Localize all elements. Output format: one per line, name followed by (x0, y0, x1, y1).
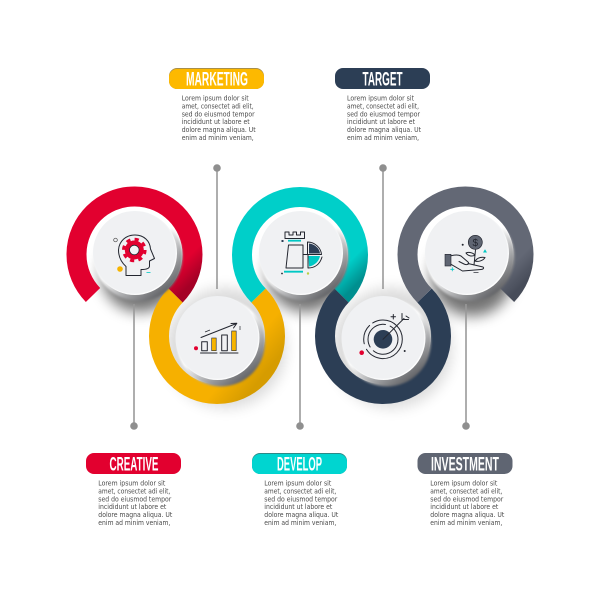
label: investment (418, 453, 512, 476)
disc: marketing (176, 296, 265, 386)
label: develop (252, 453, 347, 476)
text: investment: dolore magna aliqua. Ut (430, 511, 505, 519)
ring: teal (242, 197, 358, 296)
text: investment: Lorem ipsum dolor sit (430, 480, 498, 488)
text: creative: amet, consectet adi elit, (98, 488, 170, 496)
text: develop: dolore magna aliqua. Ut (264, 511, 339, 519)
text: creative: dolore magna aliqua. Ut (98, 511, 173, 519)
text: creative: Lorem ipsum dolor sit (98, 480, 166, 488)
text: marketing (182, 94, 256, 142)
text: develop: incididunt ut labore et (264, 503, 333, 511)
icon: target and arrow (359, 314, 409, 359)
ring: red (76, 196, 192, 296)
soft shadows (101, 234, 513, 408)
text: develop: enim ad minim veniam, (264, 519, 336, 527)
text: creative: enim ad minim veniam, (98, 519, 170, 527)
text: target: incididunt ut labore et (347, 118, 415, 126)
label: target: TARGET (362, 70, 403, 90)
text: investment: incididunt ut labore et (430, 503, 499, 511)
text: marketing: incididunt ut labore et (182, 118, 250, 126)
text: target: Lorem ipsum dolor sit (347, 94, 414, 102)
text: marketing: enim ad minim veniam, (182, 134, 254, 142)
icon: chess rook and pie (281, 232, 322, 275)
disc: investment (425, 211, 514, 301)
ring: yellow (159, 296, 275, 394)
label: marketing (169, 68, 264, 90)
text: investment (430, 480, 505, 527)
label: marketing: MARKETING (186, 70, 248, 90)
text: target: amet, consectet adi elit, (347, 102, 419, 110)
text: develop (264, 480, 339, 527)
text: creative: sed do eiusmod tempor (98, 495, 171, 503)
text: investment: enim ad minim veniam, (430, 519, 502, 527)
icon: hand with coin plant: $ (473, 238, 479, 249)
label: investment: INVESTMENT (431, 454, 499, 476)
label: creative (86, 453, 181, 476)
text: target (347, 94, 421, 142)
text: target: sed do eiusmod tempor (347, 110, 420, 118)
connector line: investment (462, 304, 470, 430)
text: target: dolore magna aliqua. Ut (347, 126, 421, 134)
label: creative: CREATIVE (110, 454, 158, 476)
connector line: develop (296, 304, 304, 430)
connector line: target (379, 164, 387, 289)
text: marketing: dolore magna aliqua. Ut (182, 126, 256, 134)
text: develop: sed do eiusmod tempor (264, 495, 337, 503)
label: develop: DEVELOP (277, 454, 322, 476)
text: investment: amet, consectet adi elit, (430, 488, 502, 496)
icon: hand with coin plant (445, 235, 487, 272)
icon: bar chart with arrow (194, 323, 240, 353)
text: creative (98, 480, 173, 527)
text: creative: incididunt ut labore et (98, 503, 167, 511)
connector line: marketing (213, 164, 221, 289)
text: marketing: sed do eiusmod tempor (182, 110, 255, 118)
ring: navy (325, 296, 441, 394)
connector line: creative (130, 304, 138, 430)
text: investment: sed do eiusmod tempor (430, 495, 503, 503)
disc: creative (93, 211, 182, 301)
text: target: enim ad minim veniam, (347, 134, 419, 142)
label: target (335, 68, 430, 90)
text: marketing: Lorem ipsum dolor sit (182, 94, 249, 102)
disc: develop (259, 211, 348, 301)
ring: grey (408, 196, 524, 296)
text: marketing: amet, consectet adi elit, (182, 102, 254, 110)
text: develop: amet, consectet adi elit, (264, 488, 336, 496)
disc: target (342, 296, 431, 386)
text: develop: Lorem ipsum dolor sit (264, 480, 332, 488)
icon: head with gear (114, 235, 154, 276)
